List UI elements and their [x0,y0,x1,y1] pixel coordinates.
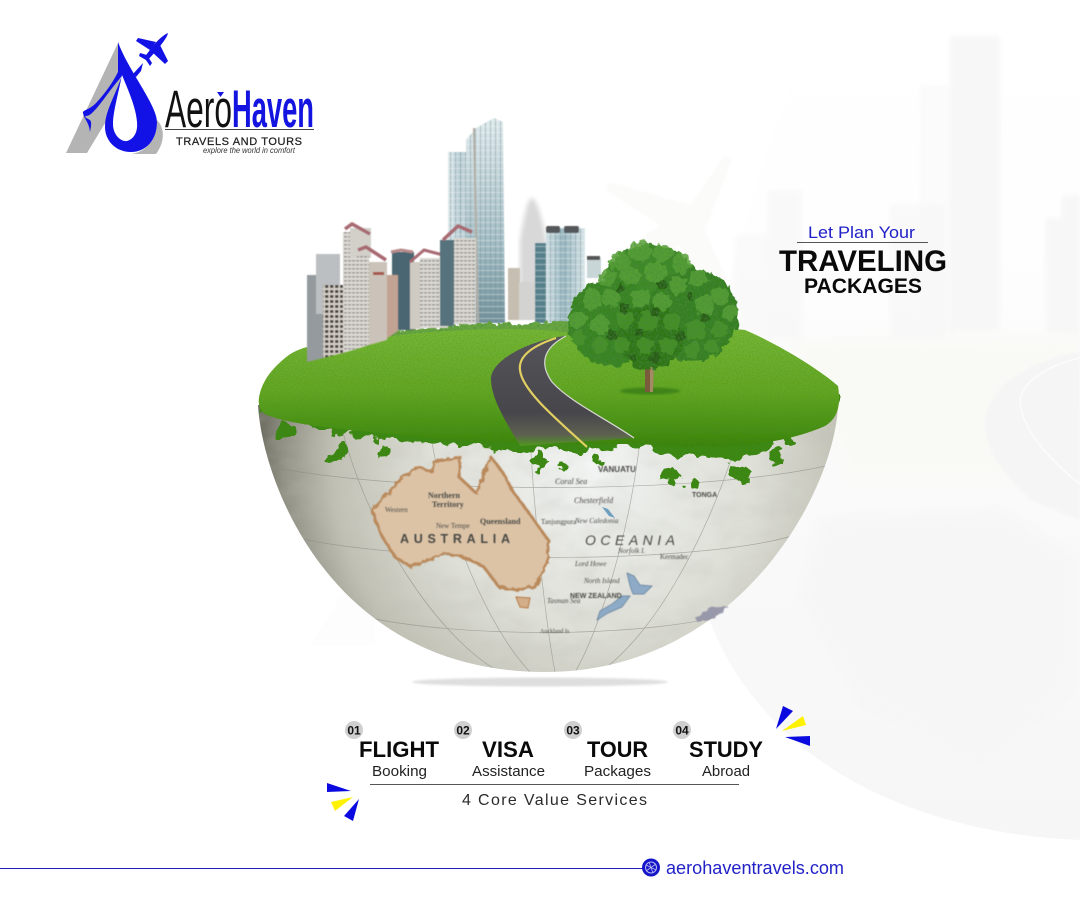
Tasmania [516,597,530,608]
map labels: Western [385,506,408,514]
map labels [385,465,717,635]
service 01: flight booking: FLIGHT [359,737,440,762]
map labels: Territory [432,500,464,509]
services rule [370,784,739,786]
logo subtitle: TRAVELS AND TOURS [176,136,302,148]
map labels: Northern [428,491,461,500]
accent burst: bottom left [327,783,359,821]
map labels: Coral Sea [555,477,587,486]
skyline buildings behind grass [448,118,601,324]
map labels: Tanjungpura [541,518,577,526]
service 01: flight booking: 01 [347,724,361,738]
grass fringe hanging over globe [260,395,838,490]
map labels: Auckland Is [540,629,570,635]
map grid lines [262,420,830,672]
service 02: visa assistance: 02 [456,724,470,738]
map labels: OCEANIA [585,532,675,548]
tree [568,241,738,394]
map labels: New Tempe [436,522,470,530]
service 02: visa assistance: Assistance [472,763,545,780]
accent burst: top right [776,706,810,746]
service 04: study abroad: Abroad [702,763,750,780]
heading: Let Plan Your Traveling Packages [779,223,947,298]
road [491,336,634,447]
hemisphere globe [258,405,838,672]
website address: aerohaventravels.com [666,858,844,878]
skyline buildings in front of grass [307,224,476,362]
grass top surface [259,326,839,447]
service 03: tour packages [564,721,651,780]
logo rule [165,128,314,130]
logo icon: accent above o [217,92,224,97]
New Zealand [597,573,652,620]
Australia landmass [372,457,548,590]
map labels: North Island [583,577,620,585]
shadow under globe [412,678,668,686]
heading line two: TRAVELING [779,245,947,278]
heading line one: Let Plan Your [808,223,915,242]
service 03: tour packages: 03 [566,724,580,738]
New Caledonia [602,507,615,518]
map labels: Tasman Sea [547,597,581,605]
service 04: study abroad: STUDY [689,737,763,762]
services caption: 4 Core Value Services [462,792,647,809]
map labels: Queensland [480,517,521,526]
service 01: flight booking: Booking [372,763,427,780]
map labels: TONGA [692,492,717,499]
map labels: New Caledonia [574,517,619,525]
service 03: tour packages: Packages [584,763,651,780]
map labels: AUSTRALIA [400,532,510,546]
map labels: Kermadec [660,553,689,561]
logo: AeroHaven [66,33,314,155]
logo icon: grey and blue A with teardrop [66,42,163,154]
faded background scene [310,0,1080,840]
service 04: study abroad: 04 [675,724,689,738]
map labels: Chesterfield [574,496,614,505]
services row [345,721,763,809]
map labels: VANUATU [598,465,636,474]
service 01: flight booking [345,721,440,780]
service 04: study abroad [673,721,763,780]
shrubs behind grass [380,321,575,342]
service 03: tour packages: TOUR [587,737,648,762]
service 02: visa assistance [454,721,545,780]
map labels: Lord Howe [574,560,606,568]
tree crown [568,241,738,370]
heading rule [797,242,928,244]
heading line three: PACKAGES [804,275,922,298]
logo icon: airplane [136,33,168,66]
service 02: visa assistance: VISA [482,737,534,762]
logo wordmark: Aero [165,80,232,139]
icon: globe web symbol [642,858,660,876]
bottom-right landmass [695,606,728,622]
footer rule [0,868,644,870]
map labels: NEW ZEALAND [570,593,622,600]
illustration: half globe with grass, city, road and tree [258,118,839,672]
logo: AeroHaven: Haven [232,80,314,139]
map labels: Norfolk I. [617,547,645,555]
logo tagline: explore the world in comfort [203,146,296,155]
